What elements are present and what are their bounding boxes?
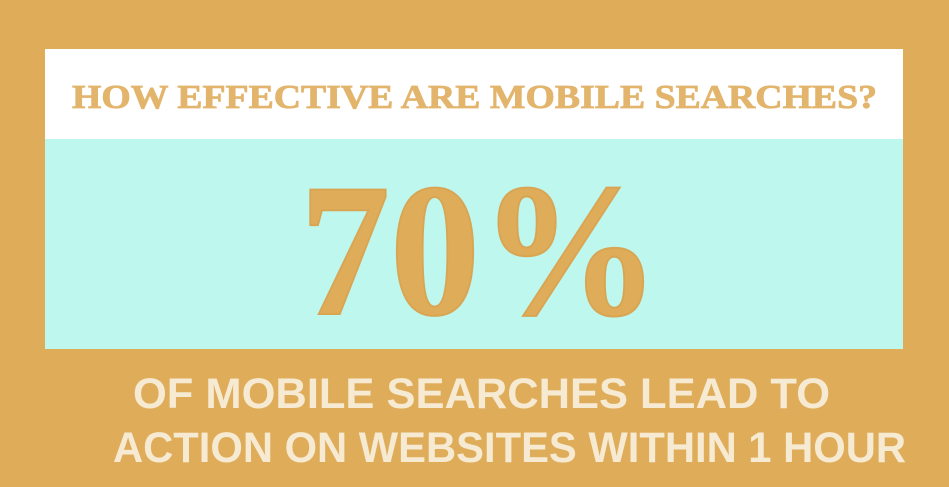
- title: HOW EFFECTIVE ARE MOBILE SEARCHES?: [72, 79, 877, 116]
- big number 70%: 70%: [300, 146, 660, 356]
- caption: [113, 370, 906, 472]
- panel: title band: [45, 49, 903, 139]
- caption: ACTION ON WEBSITES WITHIN 1 HOUR: [113, 424, 906, 472]
- caption: OF MOBILE SEARCHES LEAD TO: [133, 370, 830, 418]
